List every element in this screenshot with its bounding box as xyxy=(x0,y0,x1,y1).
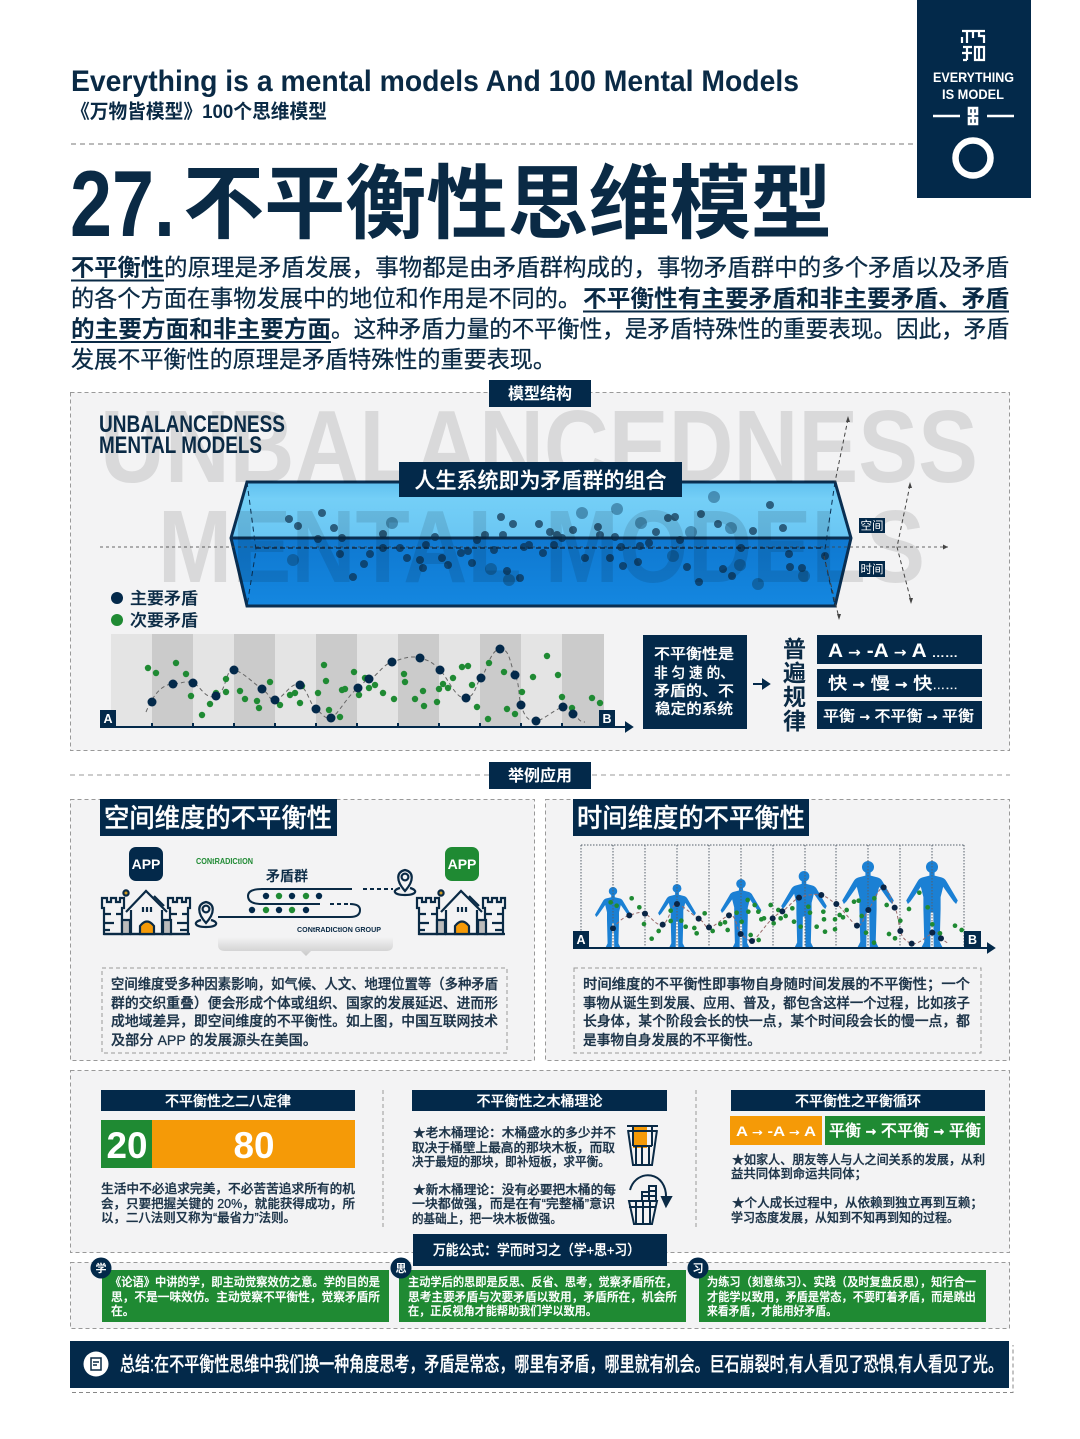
point A xyxy=(573,931,589,948)
pin right xyxy=(395,870,415,895)
heading: 空间维度的不平衡性 xyxy=(104,803,332,833)
80/20 column: 不平衡性之二八定律 xyxy=(165,1093,291,1109)
contradiction label: CONtRADICtION xyxy=(196,857,253,866)
orange pill: A → -A → A xyxy=(736,1123,816,1139)
text: 生活中不必追求完美，不必苦苦追求所有的机 xyxy=(101,1181,355,1196)
label: time: 时间 xyxy=(860,563,884,576)
panel: time dimension xyxy=(546,799,1010,1060)
description: 事物从诞生到发展、应用、普及，都包含这样一个过程，比如孩子 xyxy=(583,995,970,1011)
text: 学习态度发展，从知到不知再到知的过程。 xyxy=(731,1210,959,1225)
description xyxy=(574,968,981,1053)
intro paragraph: 发展不平衡性的原理是矛盾特殊性的重要表现。 xyxy=(71,346,556,372)
large faded dots xyxy=(287,491,810,590)
point A: A xyxy=(103,712,113,726)
rule box 1: A → -A → A …… xyxy=(828,641,958,662)
rule box 2 xyxy=(817,669,982,697)
text xyxy=(731,1152,985,1225)
point A xyxy=(100,710,116,727)
main title: 27. xyxy=(70,151,175,256)
vertical heading: 律 xyxy=(783,708,806,734)
tag: model structure: 模型结构 xyxy=(508,385,572,403)
logo text line 1: EVERYTHING xyxy=(933,69,1014,85)
curve and dots xyxy=(608,884,964,947)
card: learn xyxy=(90,1258,389,1322)
text: 取决于桶壁上最高的那块木板，而取 xyxy=(412,1140,615,1155)
text xyxy=(101,1181,355,1225)
panel: three theories xyxy=(70,1070,1010,1252)
text: ★新木桶理论：没有必要把木桶的每 xyxy=(413,1182,616,1197)
logo divider xyxy=(933,108,1014,124)
text: ★如家人、朋友等人与人之间关系的发展，从利 xyxy=(732,1152,985,1167)
point B xyxy=(599,710,615,727)
balance column xyxy=(730,1090,985,1225)
intro paragraph: 的各个方面在事物发展中的地位和作用是不同的。 xyxy=(71,286,581,312)
pointer shadow xyxy=(218,937,393,956)
app icon navy: APP xyxy=(132,856,160,872)
barrel column: 不平衡性之木桶理论 xyxy=(476,1093,602,1109)
time axis xyxy=(573,944,994,952)
chinese subtitle: 《万物皆模型》100个思维模型 xyxy=(71,100,327,123)
text: 决于最短的那块，即补短板，求平衡。 xyxy=(412,1154,610,1169)
point B xyxy=(964,931,981,948)
summary bar xyxy=(70,1341,1013,1392)
axis arrows xyxy=(824,416,948,620)
tag: examples xyxy=(489,762,591,789)
intro paragraph: 的原理是矛盾发展，事物都是由矛盾群构成的，事物矛盾群中的多个矛盾以及矛盾 xyxy=(164,254,1009,280)
logo glyph mark xyxy=(962,31,985,60)
group english label: CONtRADICtION GROUP xyxy=(297,925,381,934)
card: practice xyxy=(688,1258,986,1322)
panel heading english: UNBALANCEDNESS xyxy=(99,411,285,438)
heading: 时间维度的不平衡性 xyxy=(577,803,805,833)
box title label xyxy=(399,462,682,497)
panel: model structure xyxy=(70,389,1010,750)
route dots xyxy=(249,893,322,913)
green pill xyxy=(825,1116,985,1145)
description box xyxy=(643,635,747,729)
intro paragraph: 不平衡性有主要矛盾和非主要矛盾、矛盾 xyxy=(583,286,1009,312)
english title: Everything is a mental models And 100 Mental Models xyxy=(71,65,799,98)
description xyxy=(102,968,507,1053)
rule box 1 xyxy=(817,635,982,664)
card: learn: 学 xyxy=(96,1261,106,1275)
description: 群的交织重叠）便会形成个体或组织、国家的发展延迟、进而形 xyxy=(111,995,498,1011)
card: learn: 思，不是一味效仿。主动觉察不平衡性，觉察矛盾所 xyxy=(111,1290,380,1304)
dark dots xyxy=(148,644,578,726)
point B: B xyxy=(968,933,977,947)
label: time xyxy=(859,561,885,577)
castle left xyxy=(102,890,190,934)
point A: A xyxy=(576,933,586,947)
description box: 不平衡性是 xyxy=(654,646,735,663)
logo text line 2: IS MODEL xyxy=(942,86,1004,102)
main title: 不平衡性思维模型 xyxy=(183,160,832,250)
description: 时间维度的不平衡性即事物自身随时间发展的不平衡性；一个 xyxy=(583,976,970,993)
card: practice: 习 xyxy=(692,1262,704,1275)
80 block xyxy=(152,1120,355,1168)
people xyxy=(595,861,958,947)
legend xyxy=(111,589,198,630)
axis xyxy=(100,723,632,731)
formula heading xyxy=(413,1234,667,1266)
arrow xyxy=(753,680,769,688)
card: think xyxy=(390,1258,686,1322)
vertical heading: 规 xyxy=(783,684,806,710)
green dots xyxy=(145,653,603,722)
card: practice: 才能学以致用，矛盾是常态，不要盯着矛盾，而是跳出 xyxy=(707,1290,976,1304)
card: learn: 《论语》中讲的学，即主动觉察效仿之意。学的目的是 xyxy=(110,1275,380,1289)
intro paragraph xyxy=(71,254,1009,372)
panel heading english: MENTAL MODELS xyxy=(99,432,262,459)
card: practice: 为练习（刻意练习）、实践（及时复盘反思），知行合一 xyxy=(707,1275,976,1289)
intro paragraph: 的主要方面和非主要方面 xyxy=(71,315,331,342)
text: 的基础上，把一块木板做强。 xyxy=(412,1211,562,1226)
description box: 非 匀 速 的、 xyxy=(654,665,734,682)
legend: 主要矛盾 xyxy=(130,589,198,608)
intro paragraph: 不平衡性 xyxy=(71,254,164,280)
vertical heading: 普 xyxy=(783,636,806,662)
balance column: 不平衡性之平衡循环 xyxy=(795,1093,921,1109)
text xyxy=(412,1125,616,1226)
description: 是事物自身发展的不平衡性。 xyxy=(583,1032,761,1048)
formula heading: 万能公式：学而时习之（学+思+习） xyxy=(433,1242,640,1258)
castle right xyxy=(417,890,505,934)
timeline chart xyxy=(100,634,632,731)
text: 会，只要把握关键的 20%，就能获得成功，所 xyxy=(101,1196,355,1211)
icon: new barrel xyxy=(629,1175,671,1224)
pin left xyxy=(196,902,216,927)
group label: 矛盾群 xyxy=(266,868,308,884)
panel: space dimension xyxy=(70,799,534,1060)
card: learn: 在。 xyxy=(111,1304,135,1318)
intro paragraph: 。这种矛盾力量的不平衡性，是矛盾特殊性的重要表现。因此，矛盾 xyxy=(331,316,1009,342)
growth chart xyxy=(573,845,994,952)
orange pill xyxy=(730,1116,822,1145)
app icon green xyxy=(445,847,479,881)
card: think: 思考主要矛盾与次要矛盾以致用，矛盾所在，机会所 xyxy=(408,1290,677,1304)
label: space: 空间 xyxy=(860,518,884,532)
legend: 次要矛盾 xyxy=(130,611,198,630)
tag: examples: 举例应用 xyxy=(508,766,572,785)
vertical heading: 遍 xyxy=(783,660,806,686)
icon: note xyxy=(84,1352,108,1376)
box title label: 人生系统即为矛盾群的组合 xyxy=(414,469,666,493)
watermark line 2: MENTAL MODELS xyxy=(158,489,925,604)
route xyxy=(218,889,393,917)
panel heading english xyxy=(99,411,285,459)
icon: old barrel xyxy=(627,1125,658,1165)
logo panel xyxy=(917,0,1031,198)
card: think: 主动学后的思即是反思、反省、思考，觉察矛盾所在， xyxy=(408,1275,677,1289)
description: 空间维度受多种因素影响，如气候、人文、地理位置等（多种矛盾 xyxy=(111,976,498,992)
card: think: 思 xyxy=(396,1262,406,1275)
card: think: 在，正反视角才能帮助我们学以致用。 xyxy=(408,1304,597,1318)
green pill: 平衡 → 不平衡 → 平衡 xyxy=(829,1122,981,1140)
rule box 2: 快 → 慢 → 快 …… xyxy=(828,673,958,693)
text: 一块都做强，而是在有“完整桶”意识 xyxy=(412,1196,615,1211)
text: 以，二八法则又称为“最省力”法则。 xyxy=(101,1210,296,1225)
app icon green: APP xyxy=(448,856,476,872)
point B: B xyxy=(602,712,612,726)
tag: model structure xyxy=(489,380,591,407)
description box: 矛盾的、不 xyxy=(654,683,734,700)
app icon navy xyxy=(129,847,163,881)
barrel column xyxy=(412,1090,671,1226)
description box: 稳定的系统 xyxy=(655,700,733,718)
rule box 3 xyxy=(817,701,982,729)
text: ★个人成长过程中，从依赖到独立再到互赖； xyxy=(732,1195,983,1210)
20 block: 20 xyxy=(106,1125,148,1166)
description: 及部分 APP 的发展源头在美国。 xyxy=(111,1032,317,1048)
rule box 3: 平衡 → 不平衡 → 平衡 xyxy=(823,708,974,725)
text: 益共同体到命运共同体； xyxy=(731,1166,867,1181)
80/20 column xyxy=(101,1090,355,1225)
20 block xyxy=(101,1120,152,1168)
description: 长身体，某个阶段会长的快一点，某个时间段会长的慢一点，都 xyxy=(583,1013,970,1029)
description: 成地域差异，即空间维度的不平衡性。如上图，中国互联网技术 xyxy=(111,1013,498,1029)
scattered dots xyxy=(285,501,829,586)
card: practice: 来看矛盾，才能用好矛盾。 xyxy=(707,1304,837,1318)
80 block: 80 xyxy=(234,1125,274,1166)
logo ring xyxy=(956,140,990,176)
3d box of contradictions xyxy=(100,482,948,606)
vertical heading xyxy=(783,636,806,734)
text: ★老木桶理论：木桶盛水的多少并不 xyxy=(413,1125,616,1140)
panel: formula xyxy=(70,1234,1010,1328)
watermark line 1: UNBALANCEDNESS xyxy=(100,389,978,504)
